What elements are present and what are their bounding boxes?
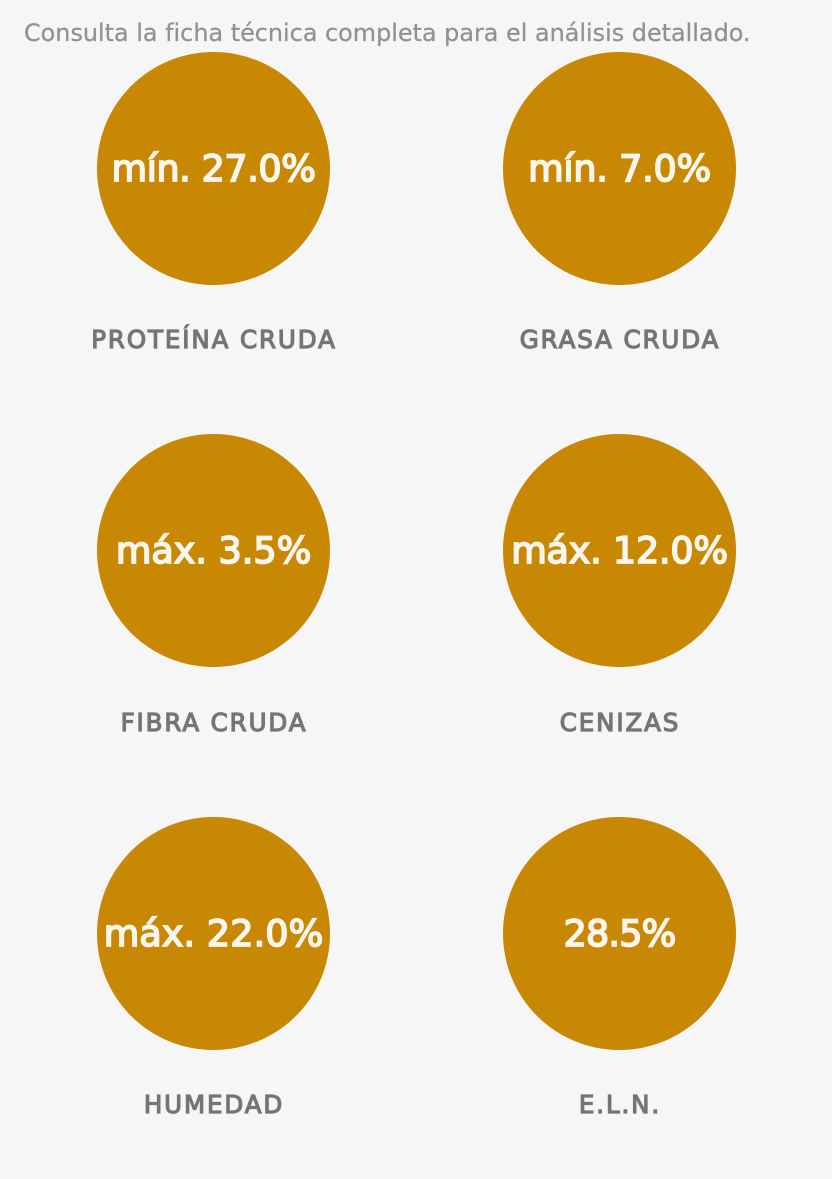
circle: máx. 3.5% bbox=[97, 434, 330, 666]
circle: mín. 7.0% bbox=[503, 52, 736, 284]
label: E.L.N. bbox=[579, 1090, 661, 1119]
circle: máx. 22.0%: máx. 22.0% bbox=[104, 912, 323, 955]
metric: E.L.N. bbox=[503, 817, 736, 1119]
circle: mín. 27.0% bbox=[97, 52, 330, 284]
circle: máx. 22.0% bbox=[97, 817, 330, 1050]
circle: mín. 7.0%: mín. 7.0% bbox=[528, 147, 711, 190]
metric: humedad bbox=[97, 817, 330, 1119]
circle: máx. 12.0%: máx. 12.0% bbox=[511, 529, 728, 572]
metric: proteína cruda bbox=[91, 52, 337, 354]
circle: 28.5% bbox=[503, 817, 736, 1050]
circle: 28.5%: 28.5% bbox=[564, 912, 676, 955]
label: FIBRA CRUDA bbox=[121, 708, 307, 737]
circle: mín. 27.0%: mín. 27.0% bbox=[112, 147, 316, 190]
circle: máx. 12.0% bbox=[503, 434, 736, 666]
label: GRASA CRUDA bbox=[520, 325, 720, 354]
metric: fibra cruda bbox=[97, 434, 330, 737]
label: CENIZAS bbox=[560, 708, 680, 737]
intro text: Consulta la ficha técnica completa para el análisis detallado. bbox=[24, 19, 751, 47]
metric: grasa cruda bbox=[503, 52, 736, 354]
label: HUMEDAD bbox=[144, 1090, 284, 1119]
circle: máx. 3.5%: máx. 3.5% bbox=[116, 529, 311, 572]
metric: cenizas bbox=[503, 434, 736, 737]
label: PROTEÍNA CRUDA bbox=[91, 325, 337, 354]
